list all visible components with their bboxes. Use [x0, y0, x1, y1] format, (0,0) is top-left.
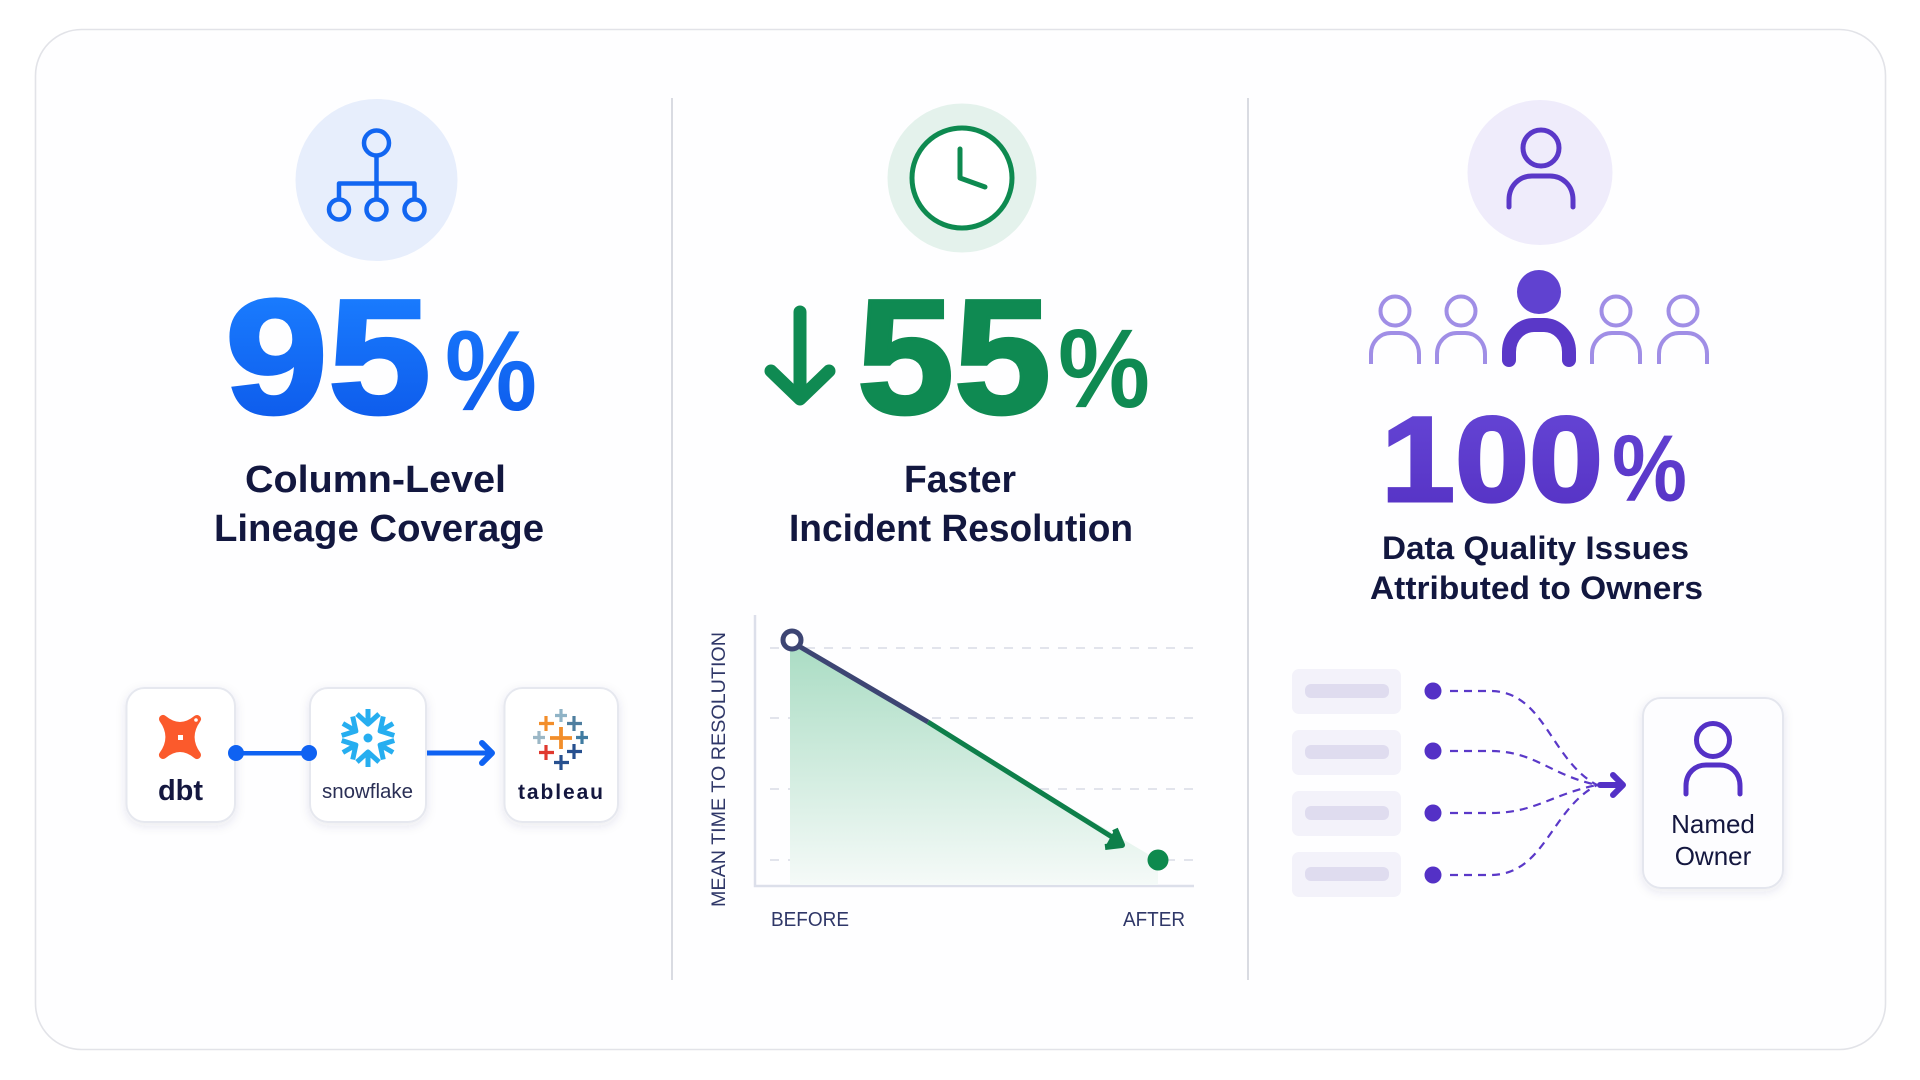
- lineage flow: [126, 688, 618, 822]
- icon: clock: [888, 104, 1036, 252]
- stat: 100%: [1381, 391, 1687, 527]
- people row: [1371, 270, 1707, 364]
- after point: [1148, 850, 1168, 870]
- card: snowflake: snowflake: [322, 781, 413, 803]
- stat: 95%: %: [445, 308, 537, 435]
- card: tableau: tableau: [518, 781, 603, 804]
- card: named owner: [1643, 698, 1783, 888]
- card: named owner: Named: [1671, 809, 1755, 839]
- panel: lineage coverage: [126, 99, 618, 822]
- label: column-level lineage coverage: Lineage Coverage: [214, 508, 544, 550]
- icon: down arrow: [771, 312, 829, 399]
- dashed links: [1450, 691, 1597, 875]
- stat: down 55%: 55: [857, 265, 1051, 448]
- stat: down 55%: [771, 265, 1150, 448]
- stat: 100%: 100: [1381, 391, 1603, 527]
- label: data quality issues attributed to owners: Attributed to Owners: [1370, 570, 1703, 606]
- card: dbt: dbt: [158, 775, 203, 807]
- panel: incident resolution: [708, 104, 1195, 931]
- stat: 100%: %: [1612, 416, 1687, 522]
- stat: 95%: [225, 265, 537, 448]
- before label: BEFORE: [771, 909, 849, 931]
- arrow head: [1105, 829, 1122, 847]
- icon: lineage tree: [296, 99, 458, 261]
- axis label: MEAN TIME TO RESOLUTION: [708, 632, 730, 907]
- card: named owner: Owner: [1675, 841, 1752, 871]
- label: data quality issues attributed to owners: Data Quality Issues: [1382, 530, 1689, 566]
- connector: dbt to snowflake: [228, 745, 317, 761]
- label: faster incident resolution: [789, 459, 1133, 550]
- card: dbt: [126, 688, 235, 822]
- card: snowflake: [310, 688, 426, 822]
- trend line: [797, 645, 928, 722]
- stat: down 55%: %: [1058, 306, 1150, 431]
- label: faster incident resolution: Faster: [904, 459, 1016, 501]
- after label: AFTER: [1123, 909, 1185, 931]
- label: faster incident resolution: Incident Resolution: [789, 508, 1133, 550]
- before point: [783, 631, 801, 649]
- panel: ownership: [1292, 100, 1783, 897]
- card: tableau: [504, 688, 618, 822]
- stat: 95%: 95: [225, 265, 431, 448]
- chart: mean time to resolution: [708, 615, 1195, 931]
- highlighted person: [1509, 270, 1569, 360]
- label: column-level lineage coverage: [214, 459, 544, 550]
- label: column-level lineage coverage: Column-Level: [245, 459, 506, 501]
- area under line: [790, 642, 1158, 885]
- arrow to owner: [1600, 775, 1623, 795]
- label: data quality issues attributed to owners: [1370, 530, 1703, 606]
- source dots: [1424, 682, 1442, 884]
- arrow: snowflake to tableau: [427, 743, 492, 763]
- issue rows: [1292, 669, 1401, 897]
- icon: person: [1468, 100, 1612, 245]
